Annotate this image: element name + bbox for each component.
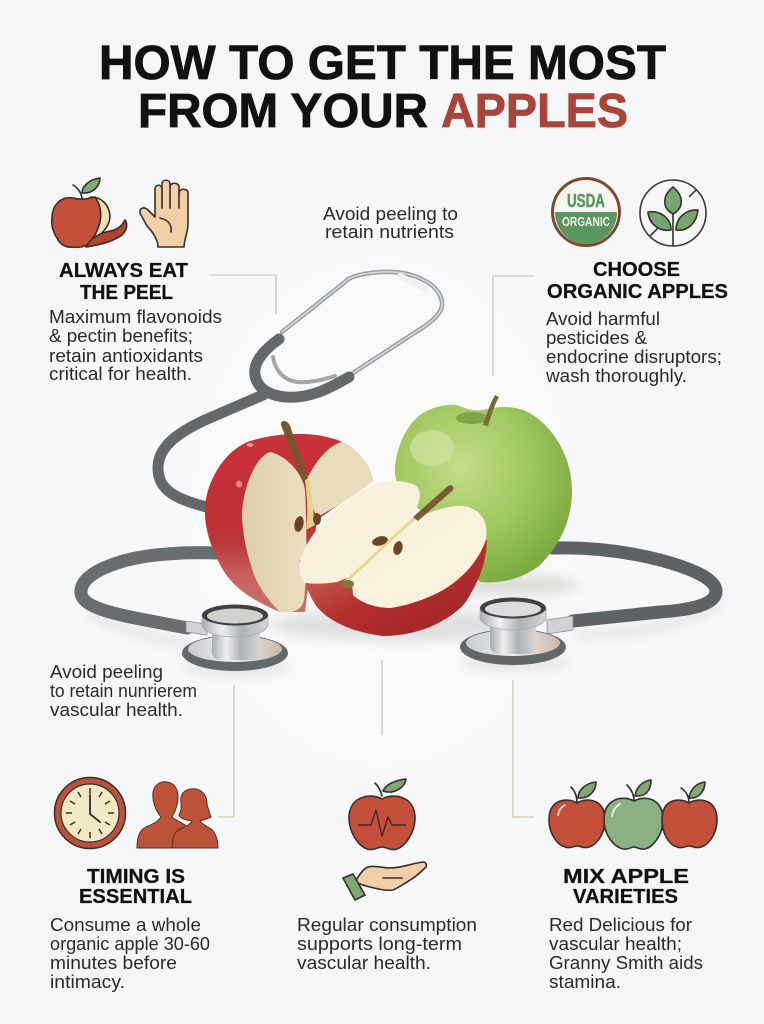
icon: apple with heartbeat bbox=[349, 779, 415, 850]
text block: minutes before bbox=[50, 953, 177, 973]
icon: clock bbox=[54, 778, 126, 848]
icon: usda organic seal: ORGANIC bbox=[562, 214, 610, 229]
text: avoid peeling top bbox=[323, 204, 458, 242]
text block: Maximum flavonoids bbox=[49, 307, 222, 327]
icon: open hand bbox=[343, 862, 426, 900]
icon: couple silhouettes bbox=[137, 782, 218, 848]
icon: usda organic seal bbox=[552, 178, 620, 246]
text block: Avoid harmful bbox=[546, 309, 660, 329]
shadows bbox=[90, 575, 720, 674]
text block: organic apple 30-60 bbox=[50, 934, 210, 954]
stethoscope metal binaurals bbox=[273, 272, 442, 382]
title bbox=[99, 37, 666, 138]
heading: ORGANIC APPLES bbox=[547, 281, 728, 303]
text block: critical for health. bbox=[49, 364, 192, 384]
chestpiece left bbox=[182, 604, 288, 671]
stethoscope lower tubes bbox=[81, 548, 716, 628]
text block bbox=[545, 309, 722, 386]
text block bbox=[49, 307, 222, 384]
text block: supports long-term bbox=[297, 934, 462, 954]
text: avoid peeling middle: Avoid peeling bbox=[50, 662, 163, 682]
text: avoid peeling top: retain nutrients bbox=[325, 222, 454, 242]
green apple bbox=[395, 395, 572, 582]
text: avoid peeling middle bbox=[50, 662, 197, 720]
heading: CHOOSE bbox=[593, 259, 680, 281]
heading: ESSENTIAL bbox=[79, 886, 192, 908]
text block: endocrine disruptors; bbox=[546, 347, 722, 367]
icon: three apples bbox=[549, 780, 717, 849]
half red apple front bbox=[300, 481, 487, 636]
title: HOW TO GET THE MOST bbox=[99, 37, 666, 90]
text: avoid peeling top: Avoid peeling to bbox=[323, 204, 458, 224]
panel: timing is essential bbox=[50, 778, 218, 992]
heading: ALWAYS EAT bbox=[59, 260, 188, 282]
text block: Regular consumption bbox=[297, 915, 477, 935]
text block bbox=[50, 915, 210, 992]
heading bbox=[79, 866, 192, 908]
text: avoid peeling middle: to retain nunrierem bbox=[50, 681, 197, 701]
text block: vascular health; bbox=[549, 934, 682, 954]
text block: & pectin benefits; bbox=[49, 326, 193, 346]
panel: choose organic apples bbox=[545, 178, 728, 386]
heading: MIX APPLE bbox=[563, 866, 689, 888]
illustration: stethoscope and apples bbox=[81, 272, 720, 674]
text block bbox=[549, 915, 703, 992]
text block: intimacy. bbox=[50, 972, 125, 992]
halved red apple bbox=[205, 421, 373, 612]
panel: always eat the peel bbox=[49, 178, 222, 384]
text block: vascular health. bbox=[297, 953, 431, 973]
panel: mix apple varieties bbox=[549, 780, 717, 992]
text block: wash thoroughly. bbox=[545, 366, 687, 386]
text block: Consume a whole bbox=[50, 915, 201, 935]
heading: VARIETIES bbox=[573, 886, 678, 908]
heading bbox=[59, 260, 188, 304]
heading bbox=[563, 866, 689, 908]
panel: regular consumption bbox=[297, 779, 477, 973]
text block: pesticides & bbox=[546, 328, 647, 348]
icon: peeled apple bbox=[52, 178, 127, 247]
text block: Red Delicious for bbox=[549, 915, 692, 935]
text block bbox=[297, 915, 477, 973]
title: APPLES bbox=[441, 85, 628, 138]
text block: stamina. bbox=[549, 972, 621, 992]
title: FROM YOUR bbox=[138, 85, 428, 138]
icon: usda organic seal: USDA bbox=[567, 191, 605, 211]
text block: retain antioxidants bbox=[49, 346, 203, 366]
heading bbox=[547, 259, 728, 303]
text block: Granny Smith aids bbox=[549, 953, 703, 973]
stethoscope upper tube bbox=[158, 339, 349, 509]
text: avoid peeling middle: vascular health. bbox=[50, 700, 183, 720]
chestpiece right bbox=[460, 598, 573, 665]
icon: no pesticide leaves bbox=[640, 180, 706, 246]
heading: TIMING IS bbox=[87, 866, 185, 888]
icon: open hand bbox=[140, 180, 188, 247]
heading: THE PEEL bbox=[80, 282, 173, 304]
